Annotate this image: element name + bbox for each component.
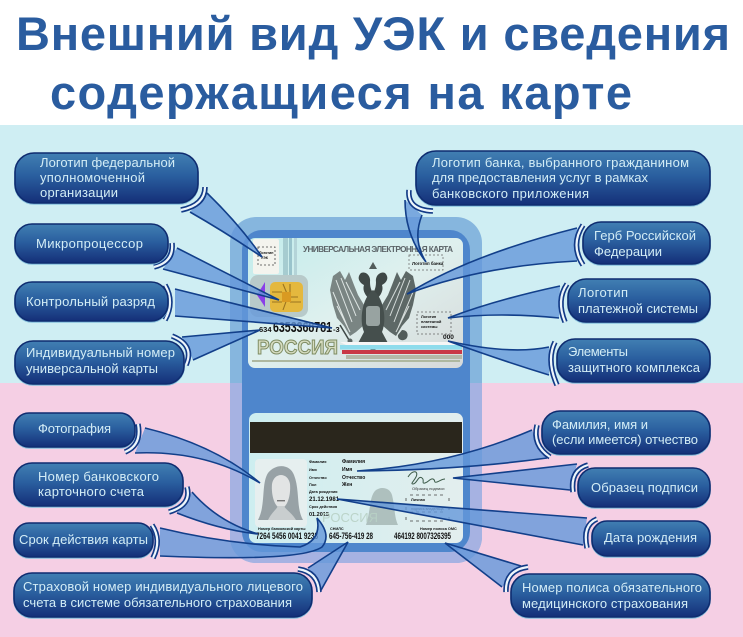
personal data fields: Дата рождения: [309, 490, 338, 494]
label: микропроцессор: [15, 224, 168, 263]
personal data fields: 21.12.1981: [309, 497, 340, 503]
label: дата рождения: [592, 521, 710, 556]
label: номер банковского счета: карточного счета: [38, 484, 145, 499]
personal data fields: Имя: [342, 467, 352, 473]
payment system logo box: [417, 312, 451, 334]
card number: 6353368781: [273, 319, 332, 336]
label: страховой номер: [14, 573, 312, 617]
label: платежная система: платежной системы: [578, 301, 698, 316]
pointer: герб: [407, 225, 583, 294]
card number: 634: [259, 325, 272, 334]
vertical stripes: [283, 238, 297, 276]
ghost photo: [366, 488, 398, 525]
security code: 000: [443, 334, 454, 341]
personal data fields: 01.2015: [309, 512, 329, 518]
label: логотип банка: Логотип банка, выбранного гражданином: [432, 155, 689, 170]
payment system logo box: платежной: [421, 320, 442, 324]
coat of arms eagle: [330, 262, 416, 354]
back numbers: 645-756-419 28: [329, 531, 373, 542]
back numbers: Номер банковской карты: [258, 527, 306, 531]
pointer: платежная система: [448, 284, 567, 322]
label: страховой номер: Страховой номер индивидуального лицевого: [23, 579, 303, 594]
label: ФИО: (если имеется) отчество: [552, 432, 698, 447]
label: номер банковского счета: [14, 463, 183, 506]
title: Внешний вид УЭК и сведения: [16, 7, 730, 60]
pointer: банковский счет: [169, 487, 258, 534]
label: логотип федеральной организации: Логотип федеральной: [40, 155, 175, 170]
personal data fields: Отчество: [342, 475, 365, 481]
back numbers: 7264 5456 0041 9238: [256, 531, 318, 542]
personal data fields: [309, 459, 365, 518]
label: логотип банка: банковского приложения: [432, 186, 589, 201]
label: герб: Федерации: [594, 244, 662, 259]
card front: [248, 238, 463, 368]
signature block fields: подпись владельца: [411, 507, 444, 511]
label: герб: Герб Российской: [594, 228, 696, 243]
signature: Образец подписи: [412, 486, 444, 491]
bank logo box: Логотип банка: [412, 261, 444, 266]
label: индивидуальный номер: универсальной карты: [26, 361, 158, 376]
label: образец подписи: Образец подписи: [591, 480, 698, 495]
personal data fields: Фамилия: [309, 460, 326, 464]
signature: [408, 472, 445, 491]
label: элементы защитного комплекса: [557, 339, 710, 382]
label: элементы защитного комплекса: Элементы: [568, 344, 628, 359]
photo: [255, 459, 307, 527]
flag stripes: [252, 342, 462, 362]
label: логотип банка: [416, 151, 710, 205]
pointer: образец подписи: [453, 464, 588, 492]
label: ФИО: Фамилия, имя и: [552, 417, 648, 432]
label: логотип федеральной организации: организации: [40, 185, 118, 200]
pointer: защитный комплекс: [448, 341, 557, 385]
label: индивидуальный номер: Индивидуальный номер: [26, 345, 175, 360]
magnetic stripe: [250, 422, 462, 453]
personal data fields: Фамилия: [342, 459, 365, 465]
pointer: полис ОМС: [445, 543, 528, 592]
card number: -3: [333, 325, 340, 334]
card back: [249, 413, 463, 543]
pointer: микропроцессор: [154, 243, 279, 300]
card number: [259, 319, 340, 336]
label: контрольный разряд: Контрольный разряд: [26, 294, 155, 309]
signature block fields: [406, 495, 449, 523]
back numbers: 464192 8007326395: [394, 531, 451, 542]
label: элементы защитного комплекса: защитного комплекса: [568, 360, 701, 375]
pointer: срок действия: [152, 518, 326, 558]
label: номер полиса: Номер полиса обязательного: [522, 580, 702, 595]
title: [16, 7, 730, 119]
signature block fields: Личная: [411, 498, 425, 502]
label: логотип федеральной организации: уполномоченной: [40, 170, 145, 185]
card title text: УНИВЕРСАЛЬНАЯ ЭЛЕКТРОННАЯ КАРТА: [303, 245, 453, 254]
logo of federal organisation box: Логотип: [259, 251, 273, 255]
label: номер полиса: [511, 574, 710, 617]
back numbers: Номер полиса ОМС: [420, 527, 457, 531]
pointer: контрольный разряд: [165, 285, 332, 328]
pointer: индивидуальный номер: [172, 330, 260, 365]
label: логотип федеральной организации: [15, 153, 198, 203]
pointer: дата рождения: [337, 499, 597, 548]
label: микропроцессор: Микропроцессор: [36, 236, 143, 251]
pointer: фотография: [125, 424, 260, 483]
label: фотография: [14, 413, 135, 447]
chip panel: [250, 275, 308, 317]
label: образец подписи: [578, 468, 710, 507]
title: содержащиеся на карте: [50, 66, 632, 119]
label: срок действия: Срок действия карты: [19, 532, 148, 547]
payment system logo box: Логотип: [421, 315, 437, 319]
personal data fields: Отчество: [309, 476, 327, 480]
РОССИЯ lettering: РОССИЯ: [257, 337, 338, 359]
personal data fields: Срок действия: [309, 505, 337, 509]
pointer: страховой номер: [298, 542, 348, 592]
pointer: ФИО: [357, 425, 550, 471]
label: платежная система: [568, 279, 710, 322]
label: логотип банка: для предоставления услуг в рамках: [432, 170, 648, 185]
personal data fields: Пол: [309, 483, 317, 487]
payment system logo box: системы: [421, 325, 438, 329]
label: дата рождения: Дата рождения: [604, 530, 697, 545]
background: cyan upper section: [0, 125, 743, 383]
personal data fields: Имя: [309, 468, 317, 472]
bank logo box: [409, 255, 444, 270]
card holder: [230, 217, 482, 563]
logo of federal organisation box: УЭК: [261, 256, 269, 260]
label: ФИО: [542, 411, 710, 454]
pointer: логотип банка: [405, 190, 433, 262]
label: номер полиса: медицинского страхования: [522, 596, 688, 611]
label: индивидуальный номер: [15, 341, 184, 384]
personal data fields: Жен: [341, 482, 352, 488]
back numbers: СНИЛС: [330, 527, 344, 531]
label: герб: [583, 222, 710, 264]
label: страховой номер: счета в системе обязательного страхования: [23, 595, 292, 610]
label: контрольный разряд: [15, 282, 168, 321]
background: pink lower section: [0, 383, 743, 637]
back numbers: [256, 527, 457, 542]
hologram РОССИЯ: РОССИЯ: [322, 510, 378, 525]
label: номер банковского счета: Номер банковского: [38, 469, 159, 484]
pointer: федеральная организация: [181, 187, 262, 257]
label: фотография: Фотография: [38, 421, 111, 436]
label: срок действия: [14, 523, 153, 557]
logo of federal organisation box: [253, 239, 279, 274]
label: платежная система: Логотип: [578, 285, 628, 300]
